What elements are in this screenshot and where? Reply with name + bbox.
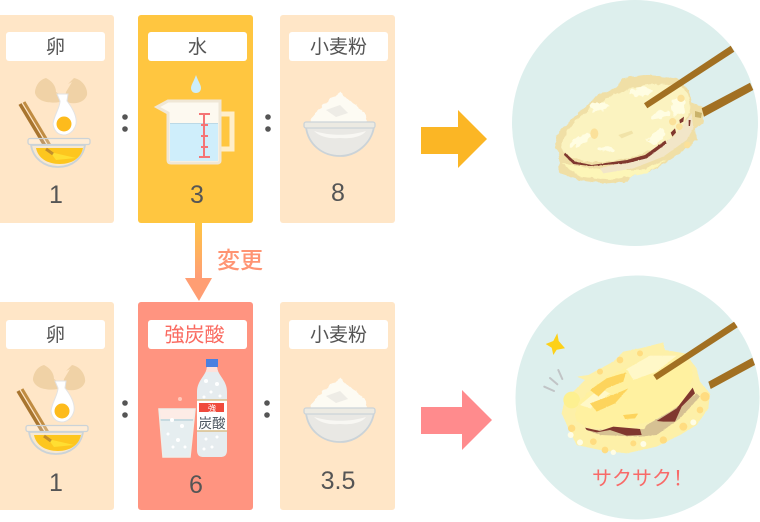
label: flour [289, 32, 388, 61]
chopsticks [653, 322, 755, 389]
colon [264, 400, 270, 418]
ratio number: 3.5 [321, 467, 355, 495]
panel: egg, top row [0, 15, 114, 223]
arrow: change [185, 223, 212, 301]
colon [122, 400, 128, 418]
icon: egg cracking into bowl [20, 78, 90, 167]
tempura [555, 75, 703, 183]
arrow: bottom result [421, 390, 492, 450]
label: flour: 小麦粉 [310, 324, 367, 346]
ratio number: 6 [189, 471, 203, 499]
tempura [562, 342, 710, 455]
icon: soda bottle: 強 [208, 403, 216, 413]
label: egg [6, 32, 105, 61]
label: change: 変更 [217, 247, 263, 273]
icon: motion lines [544, 370, 562, 391]
ratio number: 3 [190, 181, 204, 209]
label: egg [6, 320, 105, 349]
arrow: top result [421, 110, 487, 168]
icon: measuring jug [157, 101, 232, 163]
label: water [148, 32, 247, 61]
chopsticks [644, 46, 753, 117]
icon: soda bottle [197, 359, 227, 457]
icon: water drop [191, 75, 201, 93]
icon: flour bowl [304, 92, 375, 156]
panel: flour, top row [280, 15, 395, 223]
label: egg: 卵 [46, 36, 65, 58]
icon: soda bottle: 炭酸 [198, 416, 226, 431]
ratio number: 1 [49, 469, 63, 497]
panel: egg, bottom row [0, 302, 114, 510]
illustration: regular tempura [512, 0, 758, 246]
label: strong carbonated water [148, 320, 247, 349]
panel: strong carbonated water [138, 302, 253, 510]
illustration: crispy tempura [516, 276, 760, 520]
panel: water [138, 15, 253, 223]
label: flour: 小麦粉 [310, 36, 367, 58]
panel: flour, bottom row [280, 302, 395, 510]
label: flour [289, 320, 388, 349]
icon: egg cracking into bowl [18, 365, 88, 454]
ratio number: 1 [49, 181, 63, 209]
icon: glass of soda [159, 397, 195, 457]
exclamation text: サクサク！ [592, 467, 688, 490]
label: egg: 卵 [46, 324, 65, 346]
colon [122, 114, 128, 132]
icon: sparkle [546, 333, 565, 355]
colon [265, 114, 271, 132]
ratio number: 8 [331, 179, 345, 207]
label: water: 水 [188, 36, 207, 58]
icon: flour bowl [304, 378, 375, 442]
label: strong carbonated water: 強炭酸 [164, 324, 224, 346]
